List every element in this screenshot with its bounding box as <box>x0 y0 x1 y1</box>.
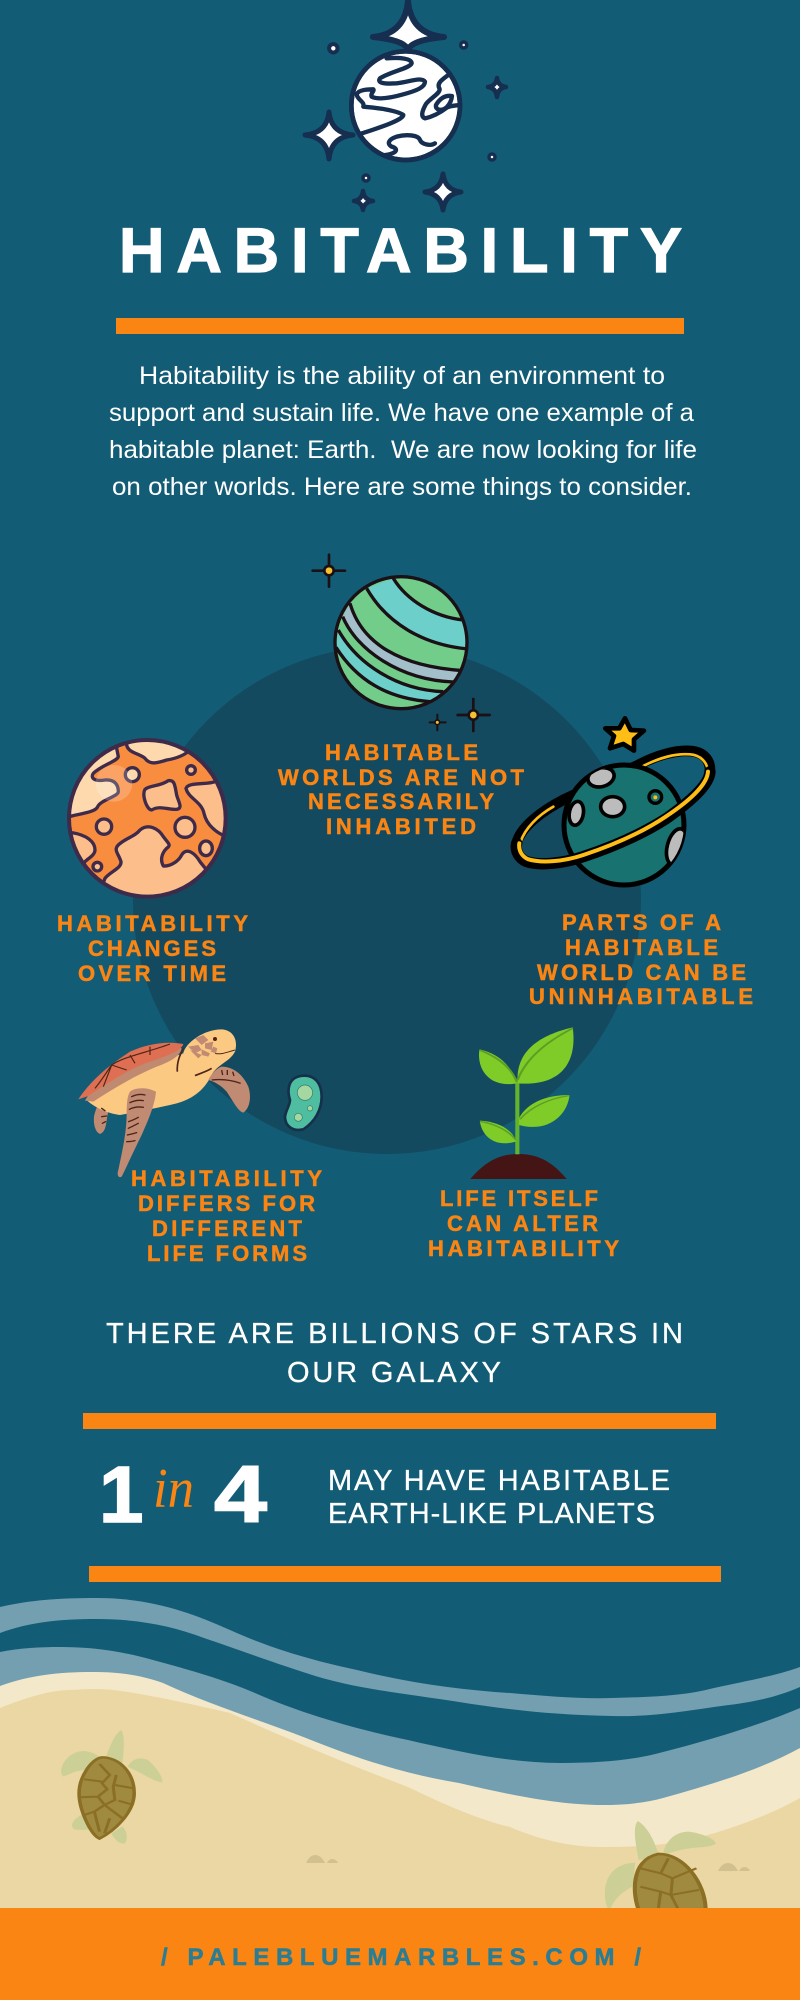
label: habitable worlds: NECESSARILY <box>308 789 494 814</box>
label: changes over time: CHANGES <box>88 936 216 961</box>
heading: billions of stars: OUR GALAXY <box>287 1357 501 1389</box>
beach scene with waves <box>0 1598 800 2000</box>
statistic: 1 in 4: 4 <box>214 1450 267 1540</box>
icon: striped green planet <box>313 555 490 731</box>
label: changes over time <box>57 911 248 986</box>
label: habitable worlds: WORLDS ARE NOT <box>278 765 525 790</box>
icon: white planet with stars <box>305 1 506 210</box>
heading: billions of stars <box>106 1318 683 1389</box>
label: habitable worlds: HABITABLE <box>325 740 478 765</box>
heading: billions of stars: THERE ARE BILLIONS OF STARS IN <box>106 1318 683 1350</box>
statistic: 1 in 4: 1 <box>99 1450 144 1539</box>
orange divider above statistic <box>83 1413 716 1429</box>
statistic: 1 in 4 <box>99 1450 267 1540</box>
statistic: 1 in 4: in <box>153 1458 194 1520</box>
label: life itself can alter habitability <box>428 1186 619 1261</box>
intro paragraph: support and sustain life. We have one example of a <box>109 399 694 427</box>
label: parts of a habitable world: PARTS OF A <box>562 910 721 935</box>
orange divider under title <box>116 318 684 334</box>
label: differs for life forms: DIFFERENT <box>152 1216 303 1241</box>
label: parts of a habitable world: HABITABLE <box>565 935 718 960</box>
icon: ringed planet with star <box>516 718 710 885</box>
intro paragraph: Habitability is the ability of an environment to <box>139 362 665 390</box>
icon: orange planet <box>67 738 228 899</box>
statistic description: EARTH-LIKE PLANETS <box>328 1498 655 1530</box>
label: differs for life forms: DIFFERS FOR <box>138 1191 315 1216</box>
dark background circle <box>133 646 641 1154</box>
icon: green microbe <box>285 1076 322 1130</box>
label: parts of a habitable world <box>529 910 753 1009</box>
icon: left beach turtle <box>61 1730 162 1844</box>
label: life itself can alter habitability: HABITABILITY <box>428 1236 619 1261</box>
icon: right beach turtle <box>605 1821 716 1910</box>
footer website text: / PALEBLUEMARBLES.COM / <box>161 1944 641 1971</box>
statistic description: MAY HAVE HABITABLE <box>328 1465 670 1497</box>
intro paragraph: habitable planet: Earth. We are now looking for life <box>109 436 697 464</box>
label: parts of a habitable world: WORLD CAN BE <box>537 960 746 985</box>
intro paragraph <box>109 362 697 501</box>
label: life itself can alter habitability: CAN ALTER <box>447 1211 598 1236</box>
label: differs for life forms <box>131 1166 322 1266</box>
statistic description <box>328 1465 670 1530</box>
label: parts of a habitable world: UNINHABITABLE <box>529 984 753 1009</box>
label: changes over time: OVER TIME <box>78 961 226 986</box>
label: habitable worlds <box>278 740 525 839</box>
label: changes over time: HABITABILITY <box>57 911 248 936</box>
title: HABITABILITY <box>119 216 682 286</box>
icon: sprout in soil <box>470 1027 574 1179</box>
label: habitable worlds: INHABITED <box>326 814 476 839</box>
icon: sea turtle <box>78 1029 250 1177</box>
label: life itself can alter habitability: LIFE ITSELF <box>440 1186 598 1211</box>
label: differs for life forms: LIFE FORMS <box>147 1241 307 1266</box>
footer bar <box>0 1908 800 2000</box>
intro paragraph: on other worlds. Here are some things to consider. <box>112 473 692 501</box>
orange divider below statistic <box>89 1566 721 1582</box>
label: differs for life forms: HABITABILITY <box>131 1166 322 1191</box>
